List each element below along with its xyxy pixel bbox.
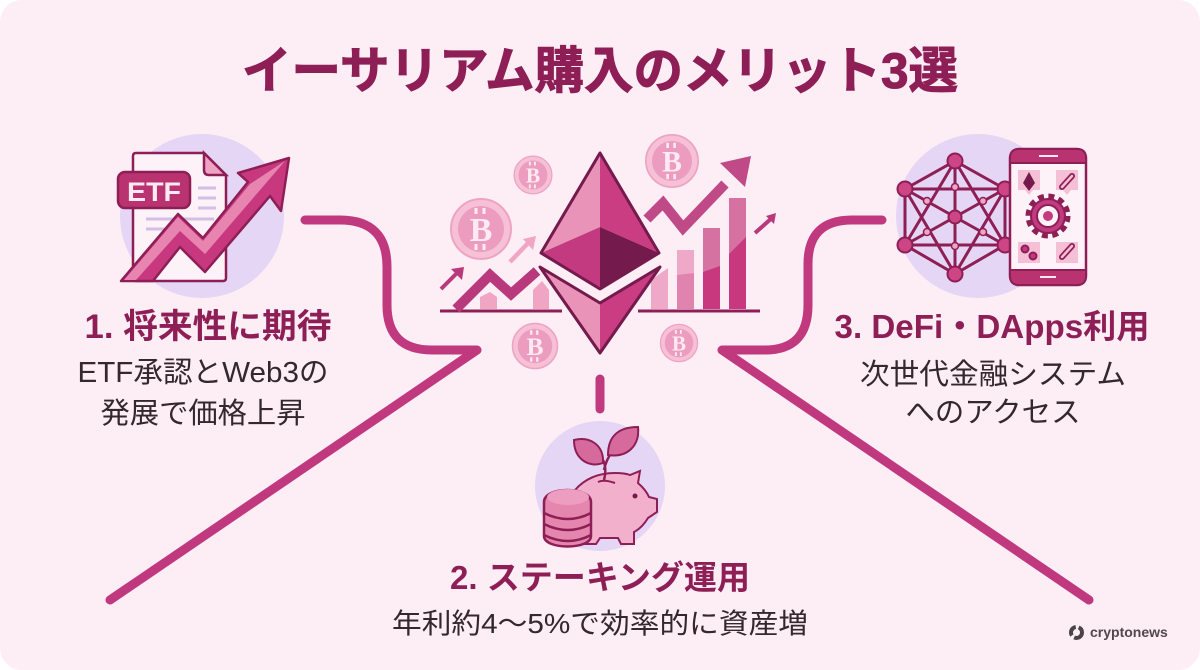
heading 2: 2. ステーキング運用 bbox=[450, 559, 750, 596]
text block 1: 発展で価格上昇 bbox=[100, 397, 306, 430]
text block 1: ETF承認とWeb3の bbox=[78, 357, 328, 389]
heading 3: 3. DeFi・DApps利用 bbox=[834, 308, 1150, 345]
text block 3: 次世代金融システム bbox=[860, 358, 1126, 391]
logo: cryptonews: cryptonews bbox=[1090, 624, 1168, 640]
text block 2: 年利約4〜5%で効率的に資産増 bbox=[392, 608, 808, 639]
icon: piggy bank with sprout and coins bbox=[535, 421, 665, 551]
text block 3 bbox=[860, 358, 1126, 429]
icon: network and smartphone bbox=[896, 134, 1086, 298]
ethereum logo bbox=[540, 153, 660, 353]
text block 3: へのアクセス bbox=[906, 397, 1080, 429]
chart left bbox=[440, 236, 562, 311]
chart right bbox=[638, 156, 776, 311]
connector lines bbox=[110, 220, 1089, 600]
title: イーサリアム購入のメリット3選 bbox=[242, 43, 958, 99]
text block 1 bbox=[78, 357, 328, 430]
coins bbox=[451, 199, 511, 259]
heading 1: 1. 将来性に期待 bbox=[84, 308, 332, 346]
icon: ETF document with rising arrow: ETF bbox=[127, 177, 181, 207]
central illustration: ethereum and market charts bbox=[440, 135, 776, 368]
icon: ETF document with rising arrow bbox=[118, 134, 289, 298]
